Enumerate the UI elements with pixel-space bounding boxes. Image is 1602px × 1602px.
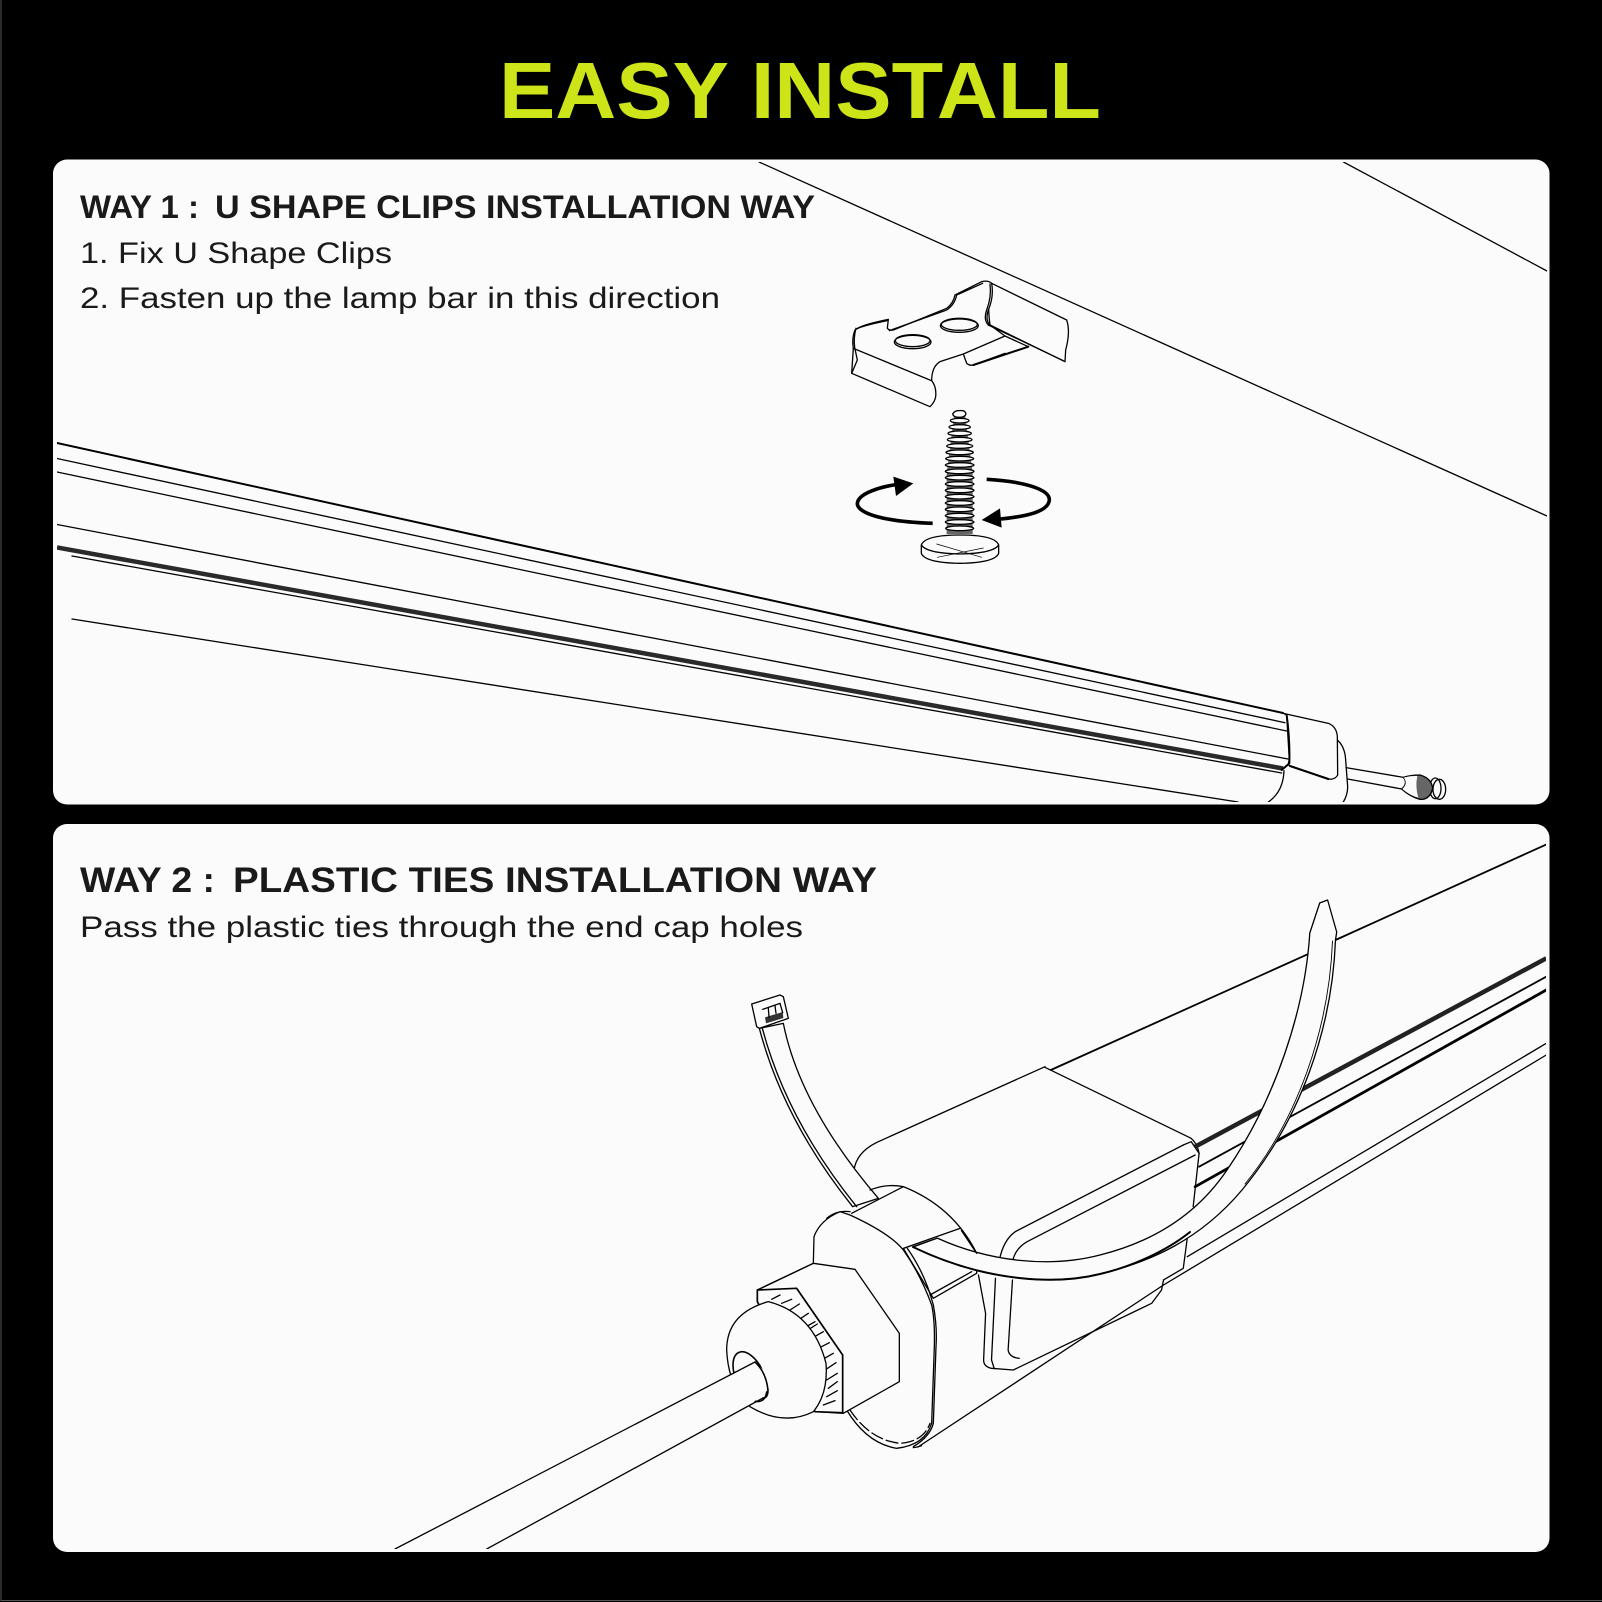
small plastic tie bbox=[752, 995, 878, 1207]
title: EASY INSTALL bbox=[499, 46, 1101, 135]
icon: screw bbox=[921, 411, 999, 563]
arrow: rotation right bbox=[982, 479, 1049, 528]
instruction text: Pass the plastic ties through the end cap holes bbox=[80, 911, 803, 944]
lamp end cap and connector bbox=[1268, 713, 1446, 802]
icon: U shape clip bbox=[852, 281, 1068, 407]
heading: way 1: U SHAPE CLIPS INSTALLATION WAY bbox=[215, 189, 815, 225]
end cap slot bbox=[903, 1228, 977, 1298]
cable gland dome bbox=[726, 1302, 826, 1418]
lamp body bbox=[395, 842, 1551, 1549]
step list: 2. Fasten up the lamp bar in this direction bbox=[80, 282, 720, 315]
step list bbox=[80, 237, 720, 315]
power cable bbox=[395, 1362, 768, 1549]
hex nut bbox=[757, 1211, 903, 1413]
end cap flange and band bbox=[847, 1184, 978, 1449]
panel: way 2 plastic ties bbox=[53, 824, 1551, 1552]
arrow: rotation left bbox=[857, 477, 933, 523]
panel: way 1 U shape clips bbox=[53, 160, 1550, 804]
heading: way 2: PLASTIC TIES INSTALLATION WAY bbox=[233, 861, 877, 900]
heading: way 1: WAY 1 : bbox=[80, 189, 199, 225]
large plastic tie bbox=[913, 900, 1337, 1280]
heading: way 2: WAY 2 : bbox=[80, 861, 215, 900]
ceiling lines bbox=[759, 162, 1547, 516]
lamp bar bbox=[57, 443, 1446, 802]
step list: 1. Fix U Shape Clips bbox=[80, 237, 392, 270]
